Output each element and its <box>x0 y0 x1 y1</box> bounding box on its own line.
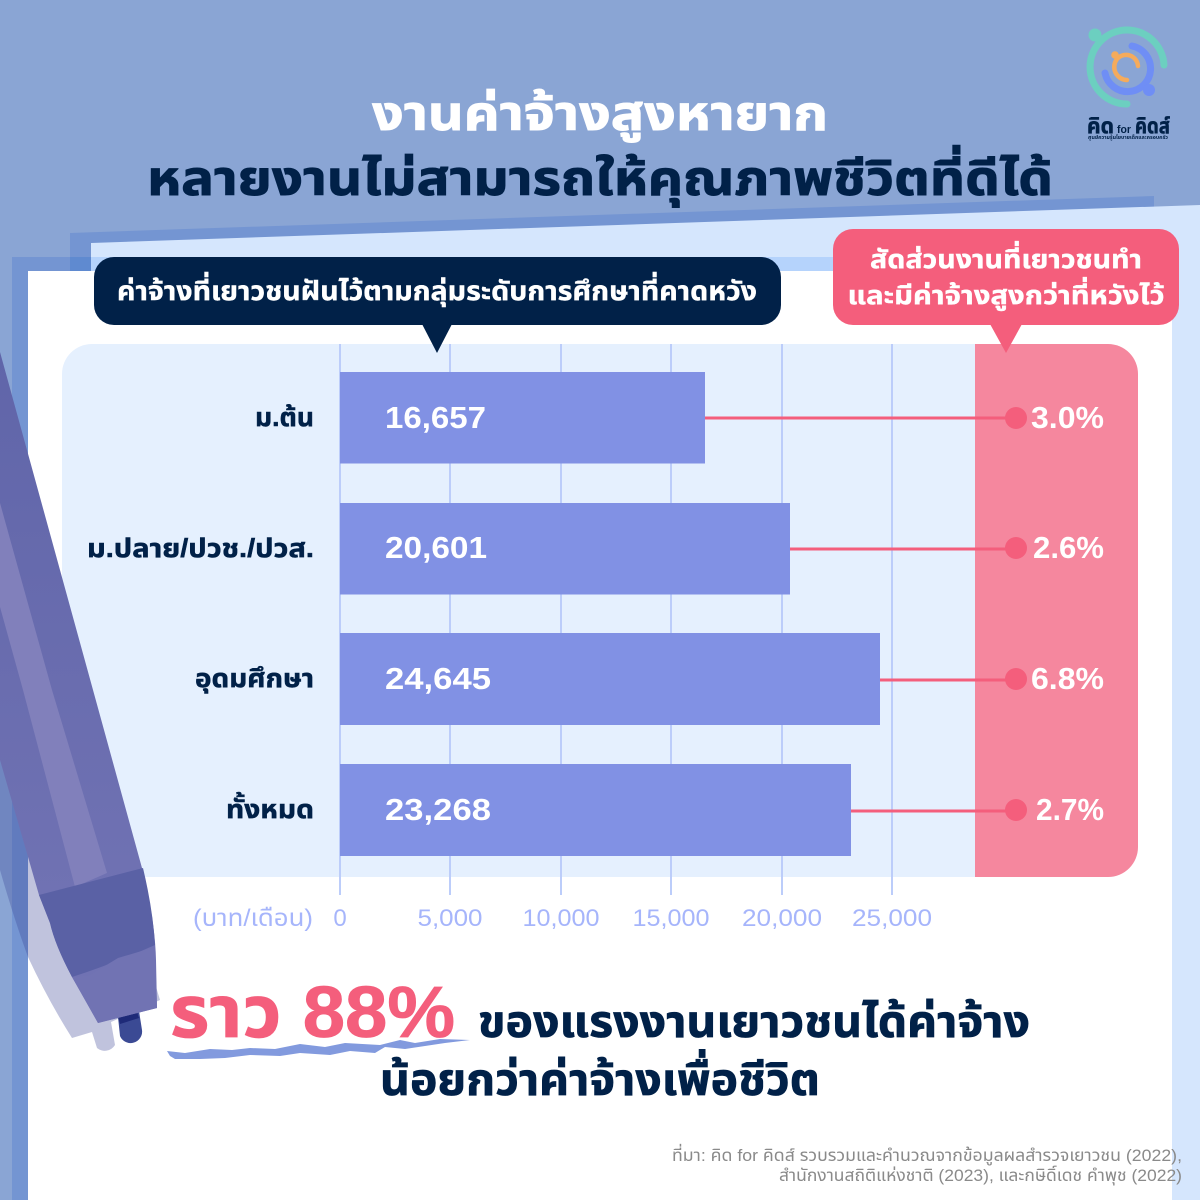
highlight text: ราว 88% <box>170 973 455 1053</box>
back sheet left <box>12 257 102 1200</box>
title: งานค่าจ้างสูงหายาก <box>372 88 828 143</box>
logo: คิดส์ <box>1135 115 1170 138</box>
back sheet <box>70 196 1154 300</box>
sheet overlap <box>70 257 91 271</box>
chart panel <box>62 344 975 877</box>
light sheet <box>91 205 1200 1200</box>
pen nib <box>118 1011 142 1043</box>
axis labels <box>193 905 932 932</box>
grid lines <box>340 344 892 895</box>
white sheet <box>28 271 1172 1200</box>
axis labels: (บาท/เดือน) <box>193 905 313 932</box>
callout: expected wage: ค่าจ้างที่เยาวชนฝันไว้ตามกลุ่มระดับการศึกษาที่คาดหวัง <box>117 272 757 307</box>
brush stroke <box>167 1039 470 1059</box>
title <box>147 88 1053 208</box>
pen highlight stripe <box>0 503 107 887</box>
bar: upper secondary: 20,601 <box>385 530 487 565</box>
bar: higher education <box>195 633 880 725</box>
bar: upper secondary: ม.ปลาย/ปวช./ปวส. <box>87 533 314 563</box>
axis labels: 15,000 <box>632 905 710 932</box>
share values <box>705 400 1104 827</box>
callout: share of jobs: สัดส่วนงานที่เยาวชนทำ <box>870 241 1142 274</box>
bar: total: 23,268 <box>385 792 491 827</box>
share values: 6.8% <box>1031 661 1104 696</box>
callout: expected wage <box>94 257 781 353</box>
title: หลายงานไม่สามารถให้คุณภาพชีวิตที่ดีได้ <box>147 145 1053 208</box>
pen shadow <box>0 760 160 1051</box>
axis labels: 25,000 <box>852 905 932 932</box>
highlight text <box>167 973 1030 1105</box>
icon: pen <box>0 352 160 1051</box>
bar: total <box>226 764 851 856</box>
light band <box>91 257 1172 271</box>
source note <box>672 1143 1182 1186</box>
highlight text: ของแรงงานเยาวชนได้ค่าจ้าง <box>478 998 1030 1047</box>
bar chart <box>87 372 880 856</box>
axis labels: 10,000 <box>522 905 600 932</box>
bar: lower secondary: 16,657 <box>385 400 486 435</box>
bar: total: ทั้งหมด <box>226 792 314 824</box>
pen end <box>72 947 157 1023</box>
share values: 2.6% <box>1033 530 1104 565</box>
bar: upper secondary <box>87 503 790 594</box>
bar: higher education: 24,645 <box>385 661 491 696</box>
share panel <box>975 344 1138 877</box>
pen dark band <box>39 868 155 977</box>
source note: สำนักงานสถิติแห่งชาติ (2023), และกษิดิ์เดช คำพุช (2022) <box>779 1165 1182 1186</box>
logo: for <box>1117 124 1132 136</box>
axis labels: 0 <box>333 905 347 932</box>
callout: share of jobs: และมีค่าจ้างสูงกว่าที่หวังไว้ <box>848 277 1164 311</box>
callout: share of jobs <box>833 229 1179 353</box>
source note: ที่มา: คิด for คิดส์ รวบรวมและคำนวณจากข้อมูลผลสำรวจเยาวชน (2022), <box>672 1143 1182 1167</box>
share values: 2.7% <box>1036 792 1104 827</box>
logo <box>1087 28 1170 141</box>
share values: 3.0% <box>1031 400 1104 435</box>
pen body <box>0 352 157 1023</box>
logo: คิด <box>1087 115 1114 138</box>
logo: ศูนย์ความรู้นโยบายเด็กและครอบครัว <box>1088 134 1168 141</box>
axis labels: 5,000 <box>418 905 482 932</box>
highlight text: น้อยกว่าค่าจ้างเพื่อชีวิต <box>380 1049 820 1105</box>
bar: higher education: อุดมศึกษา <box>195 663 314 694</box>
bar: lower secondary <box>255 372 705 464</box>
axis labels: 20,000 <box>742 905 822 932</box>
bar: lower secondary: ม.ต้น <box>255 402 314 432</box>
